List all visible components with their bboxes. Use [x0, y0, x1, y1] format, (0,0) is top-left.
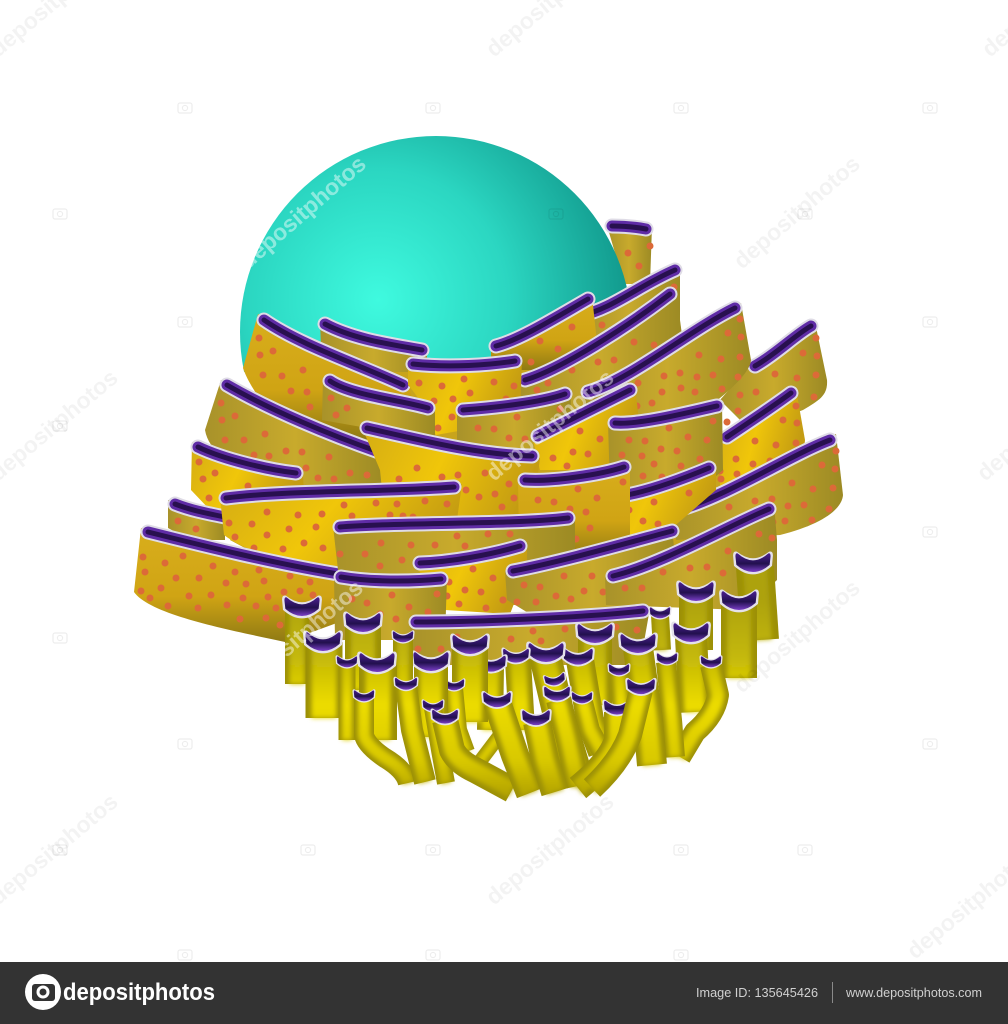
watermark text: depositphotos [481, 788, 619, 910]
cisterna: left small bright [191, 442, 305, 510]
tubule 26 [592, 678, 657, 788]
cisterna: wide left middle [220, 484, 462, 570]
tubule 30 [671, 621, 711, 712]
tubule 14 [430, 708, 512, 790]
cisterna: lower left short [334, 575, 447, 640]
watermark camera marks [53, 103, 937, 960]
tubule 2 [303, 630, 343, 718]
tubule 4 [335, 655, 359, 740]
tubule 27 [578, 699, 632, 788]
cisterna: centre long bright [361, 425, 540, 540]
tubule 24 [607, 663, 631, 715]
watermark text: depositphotos [231, 574, 368, 698]
cisterna: upper right back [577, 265, 680, 345]
watermark text: depositphotos [234, 150, 371, 274]
cisterna: top centre [408, 357, 522, 435]
cisterna: centre wide olive [333, 514, 575, 590]
tubule 21 [542, 671, 578, 786]
footer logo icon [25, 974, 61, 1010]
tubule 10 [450, 633, 490, 722]
tubule 3 [343, 611, 383, 690]
tubule 25 [618, 632, 658, 765]
tubule 31 [680, 655, 723, 757]
tubule 15 [481, 691, 530, 793]
cisterna: bottom wide [409, 608, 650, 665]
backing fill between cisternae [230, 360, 725, 605]
tubule 29 [655, 652, 679, 757]
cisterna behind nucleus [606, 222, 652, 284]
cisterna: far left small [168, 500, 225, 540]
cisterna: second row left small [322, 378, 435, 440]
cisterna: upper left [243, 314, 420, 440]
cisterna: long upper right [520, 290, 682, 420]
tubule 12 [442, 678, 466, 752]
tubule 19 [575, 622, 615, 705]
tubule 6 [391, 630, 415, 695]
tubule 28 [648, 606, 672, 650]
cisterna: second row centre [457, 390, 571, 450]
cisterna: large upper right [583, 303, 751, 440]
footer website: www.depositphotos.com [845, 986, 982, 1000]
cisterna: centre right olive [608, 402, 723, 490]
footer bar [0, 962, 1008, 1024]
watermark text: depositphotos [728, 150, 865, 274]
footer divider [832, 982, 833, 1003]
cisterna: lower right wide [503, 529, 680, 614]
footer image id: Image ID: 135645426 [696, 986, 818, 1000]
cisterna: long lower left [134, 528, 350, 642]
cisterna: upper centre right [491, 296, 600, 370]
tubule 9 [411, 650, 451, 737]
tubule 22 [520, 709, 555, 792]
vesicular tubules [282, 551, 773, 793]
tubule 7 [352, 689, 408, 783]
watermark text: depositphotos [481, 364, 619, 486]
tubule 18 [561, 647, 602, 752]
cisterna: centre small bright [413, 542, 527, 614]
tubule 16 [501, 647, 531, 730]
back crossing tubule [472, 735, 500, 772]
tubule 33 [719, 589, 759, 678]
tubule 13 [421, 699, 446, 783]
tubule 34 [733, 551, 773, 640]
watermark text: depositphotos [728, 574, 865, 698]
cisterna: large left [205, 380, 385, 490]
cisterna: centre right bright [600, 463, 716, 540]
tubule 23 [570, 691, 602, 752]
cisterna: right middle bright [720, 389, 805, 490]
tubule 11 [474, 654, 508, 730]
tubule 5 [357, 651, 397, 740]
tubule 32 [676, 580, 716, 650]
footer logo wordmark: depositphotos [63, 979, 215, 1006]
cisterna: far right lower [671, 434, 843, 540]
cisterna: upper centre small [320, 321, 427, 372]
tubule 17 [526, 641, 578, 780]
cisterna: centre diagonal [532, 386, 640, 470]
golgi cisternae stack [134, 265, 843, 665]
tubule 1 [282, 595, 322, 684]
nucleus sphere [240, 136, 627, 372]
cisterna: far right top [720, 322, 827, 430]
cisterna: centre short [518, 462, 630, 560]
cisterna: lower right diagonal [605, 503, 777, 610]
tubule 8 [393, 677, 425, 782]
